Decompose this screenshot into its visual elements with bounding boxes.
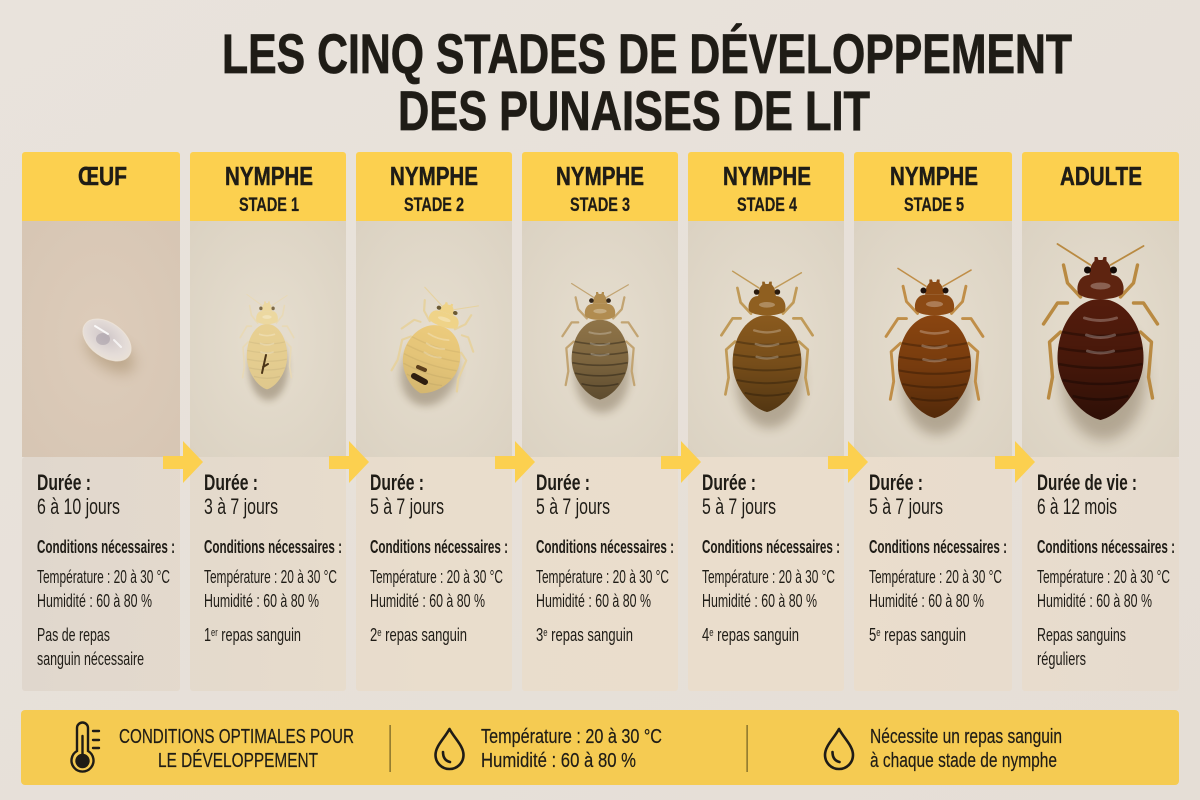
text: blood meal requirement: à chaque stade de nymphe [870,750,1057,772]
photo: stage 5 nymph [854,221,1012,457]
header: stade 5: NYMPHE [890,161,978,191]
text: stade 2 details: Humidité : 60 à 80 % [370,590,485,611]
text: stade 2 details: Durée : [370,470,424,495]
text: stade 3 details: 3 [536,624,546,645]
icon: water drop (blood meal) [825,729,853,769]
photo: egg [22,221,180,457]
panel: nymphe stade 5 [854,152,1012,691]
text: adulte details [1037,470,1175,669]
header: stade 1: STADE 1 [239,195,299,216]
header: adulte [1022,152,1179,221]
text: blood meal requirement: Nécessite un repas sanguin [870,726,1062,748]
text: stade 5 details: 5 à 7 jours [869,494,943,519]
text: stade 5 details: Conditions nécessaires : [869,536,1007,557]
text: stade 2 details: 2 [370,624,380,645]
photo: stage 2 nymph [356,221,512,457]
header: stade 2: STADE 2 [404,195,464,216]
label: conditions optimales [119,726,354,772]
text: stade 5 details: Durée : [869,470,923,495]
arrow: stade 4 to stade 5 [828,441,868,483]
text: stade 3 details: repas sanguin [548,624,633,645]
text: stade 5 details: Température : 20 à 30 °C [869,566,1002,587]
arrow: œuf to stade 1 [163,441,203,483]
text: stade 2 details: Conditions nécessaires : [370,536,508,557]
text: stade 2 details: e [377,627,382,639]
panel: œuf [22,152,180,691]
text: stade 3 details [536,470,674,645]
text: stade 1 details: 1 [204,624,214,645]
header: stade 1: NYMPHE [225,161,313,191]
text: stade 1 details: Température : 20 à 30 °C [204,566,337,587]
text: stade 2 details [370,470,508,645]
text: stade 5 details: 5 [869,624,879,645]
text: stade 2 details: repas sanguin [382,624,467,645]
text: stade 1 details: 3 à 7 jours [204,494,278,519]
header: stade 4 [688,152,844,221]
text: stade 1 details: Conditions nécessaires : [204,536,342,557]
header: œuf: ŒUF [78,161,127,191]
text: stade 1 details: Humidité : 60 à 80 % [204,590,319,611]
arrow: stade 2 to stade 3 [495,441,535,483]
text: temperature and humidity [481,726,662,772]
text: stade 4 details: Humidité : 60 à 80 % [702,590,817,611]
title [222,22,1072,142]
header: stade 2 [356,152,512,221]
header: stade 5: STADE 5 [904,195,964,216]
text: stade 3 details: Humidité : 60 à 80 % [536,590,651,611]
label: conditions optimales: LE DÉVELOPPEMENT [158,749,318,772]
bottom bar: optimal conditions [21,710,1179,785]
text: stade 1 details: Durée : [204,470,258,495]
arrow: stade 3 to stade 4 [661,441,701,483]
photo: adult bed bug [1022,221,1179,457]
header: stade 3: NYMPHE [556,161,644,191]
text: stade 2 details: 5 à 7 jours [370,494,444,519]
text: stade 5 details: Humidité : 60 à 80 % [869,590,984,611]
text: œuf details: Conditions nécessaires : [37,536,175,557]
header: stade 5 [854,152,1012,221]
text: adulte details: Durée de vie : [1037,470,1137,495]
header: stade 1 [190,152,346,221]
text: stade 4 details: e [709,627,714,639]
text: œuf details: Température : 20 à 30 °C [37,566,170,587]
text: adulte details: Repas sanguins [1037,624,1126,645]
text: stade 4 details [702,470,840,645]
text: stade 1 details: repas sanguin [218,624,301,645]
text: temperature and humidity: Humidité : 60 à 80 % [481,750,636,772]
photo: stage 3 nymph [522,221,678,457]
text: œuf details: Humidité : 60 à 80 % [37,590,152,611]
text: stade 4 details: repas sanguin [714,624,799,645]
text: stade 1 details: er [211,627,218,639]
icon: water drop (climate) [436,729,464,769]
text: stade 3 details: Conditions nécessaires : [536,536,674,557]
text: stade 3 details: Durée : [536,470,590,495]
photo: stage 1 nymph [190,221,346,457]
text: stade 4 details: 5 à 7 jours [702,494,776,519]
text: stade 5 details: e [876,627,881,639]
header: œuf [22,152,180,221]
text: stade 4 details: Durée : [702,470,756,495]
panel: nymphe stade 1 [190,152,346,691]
text: œuf details [37,470,175,669]
header: adulte: ADULTE [1060,161,1142,191]
header: stade 3: STADE 3 [570,195,630,216]
panel: nymphe stade 4 [688,152,844,691]
text: œuf details: Durée : [37,470,91,495]
arrow: stade 5 to adulte [995,441,1035,483]
icon: thermometer [72,723,99,772]
header: stade 2: NYMPHE [390,161,478,191]
header: stade 3 [522,152,678,221]
text: stade 4 details: 4 [702,624,712,645]
text: stade 3 details: e [543,627,548,639]
arrow: stade 1 to stade 2 [329,441,369,483]
photo: stage 4 nymph [688,221,844,457]
text: stade 4 details: Conditions nécessaires : [702,536,840,557]
text: stade 2 details: Température : 20 à 30 °C [370,566,503,587]
text: œuf details: 6 à 10 jours [37,494,120,519]
header: stade 4: NYMPHE [723,161,811,191]
text: adulte details: réguliers [1037,648,1086,669]
text: stade 4 details: Température : 20 à 30 °C [702,566,835,587]
text: stade 3 details: 5 à 7 jours [536,494,610,519]
text: œuf details: Pas de repas [37,624,110,645]
text: adulte details: 6 à 12 mois [1037,494,1117,519]
panel: adulte [1022,152,1179,691]
text: blood meal requirement [870,726,1062,772]
text: œuf details: sanguin nécessaire [37,648,144,669]
header: stade 4: STADE 4 [737,195,797,216]
text: stade 5 details: repas sanguin [881,624,966,645]
panel: nymphe stade 3 [522,152,678,691]
text: stade 5 details [869,470,1007,645]
title: DES PUNAISES DE LIT [398,79,870,142]
text: stade 1 details [204,470,342,645]
label: conditions optimales: CONDITIONS OPTIMALES POUR [119,726,354,748]
text: stade 3 details: Température : 20 à 30 °C [536,566,669,587]
text: temperature and humidity: Température : 20 à 30 °C [481,726,662,748]
panel: nymphe stade 2 [356,152,512,691]
